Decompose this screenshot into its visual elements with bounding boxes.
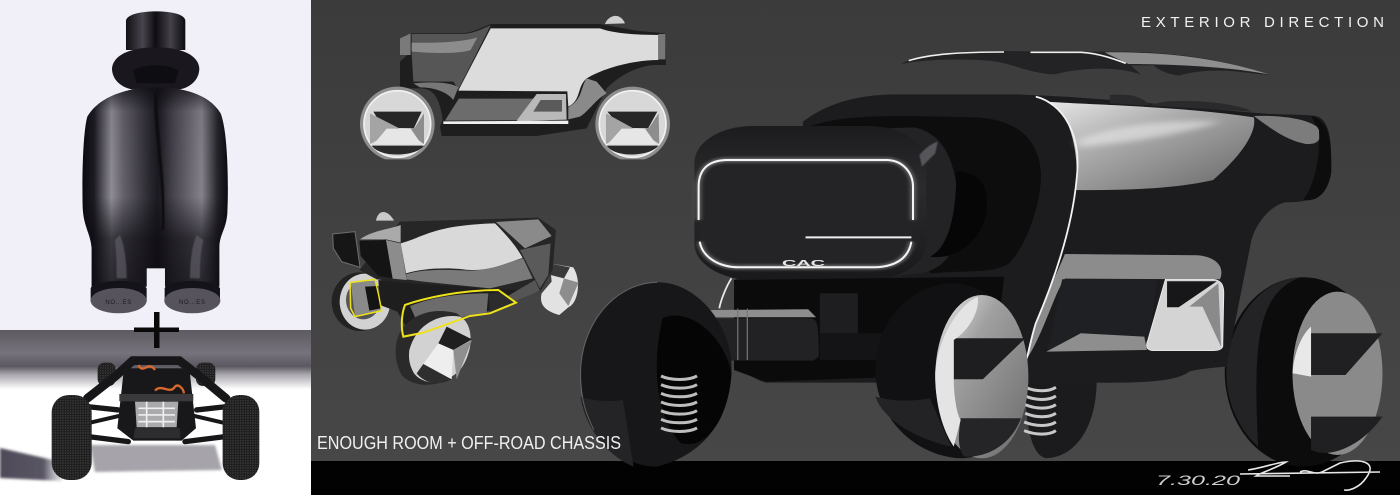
highlight edge line [1026,97,1078,360]
vent inner [533,100,562,112]
front pod shadow [930,172,987,257]
floor shadow [0,448,62,481]
rear suspension coil [1024,387,1056,434]
left side wheel [360,87,435,161]
front bumper block [713,318,819,361]
near left wheel [332,272,390,331]
side vent [1147,279,1224,351]
rear pale highlight [413,82,458,100]
left foot: NO...ES [105,300,132,306]
side window top shadow [458,94,536,99]
left vent [333,232,360,267]
signature scribble [1240,461,1380,490]
helmet bump [376,212,394,221]
sill highlight [443,121,568,124]
rear fender reflection [1254,116,1320,144]
dark rear body [359,218,556,292]
helmet bump [605,16,625,24]
front recess dark [365,286,381,311]
yellow highlight: side opening [402,290,516,337]
rear spring housing [1025,380,1097,458]
lower side bay reflection [1046,333,1147,352]
vehicle body [734,94,1331,383]
cabin hood inner [808,116,1041,273]
sketch: side view vehicle [360,16,670,161]
side vent cut [488,293,514,312]
upper reflective panel [1046,102,1254,190]
light body panel [458,28,658,107]
right vent [359,240,393,278]
panel hot spot [1078,121,1221,147]
bottle flange [112,47,199,89]
right foot [164,281,220,313]
signature and date [1156,461,1380,490]
far rear wheel [541,263,579,315]
left foot [91,281,147,313]
battery block [135,402,178,427]
title: EXTERIOR DIRECTION [1141,14,1384,31]
far right wheel [1225,277,1382,467]
light signature lower [700,242,911,267]
centre tub [117,368,196,441]
left front wheel [581,282,732,467]
rear grey panel [520,243,551,288]
chassis arms [87,361,227,442]
rear sill band [507,280,540,303]
front suspension coil [661,376,697,431]
vent roof [360,225,401,243]
screen glow [700,161,912,267]
front right tyre [223,395,259,480]
studio backdrop [0,0,311,330]
rear grey section [412,25,491,89]
side window [445,98,567,121]
sketch: main front three-quarter vehicle [581,51,1382,467]
sketch: three-quarter view vehicle [332,212,579,385]
right leg highlight [190,235,203,278]
bottle body [82,87,228,287]
lower reflective strip [1026,254,1221,360]
skid plate bolts [133,428,180,438]
grey strip [412,37,477,53]
orange cables [138,365,184,393]
bottle shading [82,87,228,287]
icon: plus sign [134,312,179,348]
light bar [806,236,911,238]
rear fender grey [568,78,607,119]
roof wing [901,51,1270,76]
floor backdrop [0,330,311,495]
panel: sketch background [311,0,1400,461]
bumper slots [738,309,747,360]
front left tyre [52,395,92,480]
date: 7.30.20 [1156,472,1240,488]
caption: ENOUGH ROOM + OFF-ROAD CHASSIS [317,433,621,453]
right foot: NO...ES [179,300,206,306]
axle lower [820,333,883,360]
centre wheel [875,283,1028,458]
lower wing grey [400,33,411,55]
light signature upper [699,160,913,220]
chassis sill [378,280,540,333]
rear tyres [98,363,215,386]
ground band [311,461,1400,495]
right side wheel [595,87,670,161]
pod reflection [919,142,938,167]
rear fender dark rim [1303,116,1331,200]
bottle centre seam [155,93,164,230]
panel: package and chassis photo column [0,0,311,495]
bumper top [671,309,816,317]
rear grey shoulder [496,219,552,248]
icon: bottle-shaped package volume [82,11,228,313]
undercarriage [734,277,1004,382]
flange collar [133,65,178,83]
motor detail [138,402,175,427]
chassis ground shadow [90,445,222,472]
front pod side [882,127,958,278]
cross bar [119,394,193,401]
roof detail [1110,95,1253,112]
bottle neck cap [126,11,185,50]
vent highlight [517,94,567,121]
side body silhouette [400,24,666,136]
off-road chassis [52,361,259,480]
lower grey side bodywork [410,293,488,328]
strut line [719,278,731,308]
light side panel [401,223,523,273]
lower side bay [1046,279,1158,352]
vent surround [386,240,407,280]
axle column [820,293,858,333]
left leg highlight [115,235,127,278]
yellow highlight: front opening [350,279,382,317]
front recess panel [351,281,381,316]
lower grey panel [406,259,533,288]
light signature glow [699,160,913,267]
near front wheel [396,311,472,385]
front pod [694,126,926,280]
rear vent grey [658,34,665,59]
logo: CAC badge: CAC [782,259,826,268]
